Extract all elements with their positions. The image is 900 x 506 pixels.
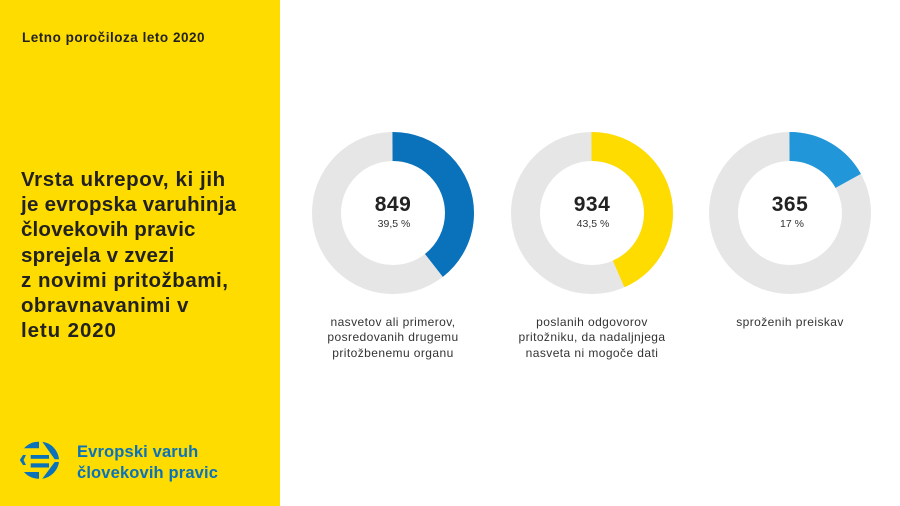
value: 934: 934 [574, 193, 610, 216]
caption 2: nasveta ni mogoče dati [526, 346, 658, 360]
panel: yellow sidebar [0, 0, 280, 506]
caption 2: poslanih odgovorov [536, 314, 648, 328]
title: je evropska varuhinja [21, 193, 236, 216]
donut chart: 39.5 % [312, 132, 474, 294]
donut chart: 17 % [709, 132, 871, 294]
icon: ombudsman logo [20, 442, 59, 479]
percentage: 39,5 %: 39,5 % [378, 218, 410, 230]
organisation name [77, 443, 218, 482]
title: z novimi pritožbami, [21, 269, 228, 292]
caption 3: sproženih preiskav [736, 314, 844, 328]
caption 1: posredovanih drugemu [327, 330, 459, 344]
caption 2 [518, 314, 666, 360]
title: sprejela v zvezi [21, 244, 175, 267]
title: letu 2020 [21, 319, 117, 342]
caption 1 [327, 314, 459, 360]
value: 365: 365 [772, 193, 808, 216]
report label: Letno poročiloza leto 2020 [22, 30, 205, 45]
caption 1: nasvetov ali primerov, [330, 314, 456, 328]
organisation name: Evropski varuh [77, 443, 198, 461]
organisation name: človekovih pravic [77, 464, 218, 482]
percentage: 17 %: 17 % [780, 218, 804, 230]
title: človekovih pravic [21, 218, 196, 241]
percentage: 43,5 %: 43,5 % [577, 218, 609, 230]
caption 2: pritožniku, da nadaljnjega [518, 330, 666, 344]
title [20, 168, 236, 342]
donut chart: 43.5 % [511, 132, 673, 294]
title: obravnavanimi v [21, 294, 189, 317]
title: Vrsta ukrepov, ki jih [21, 168, 226, 191]
value: 849: 849 [375, 193, 411, 216]
caption 1: pritožbenemu organu [332, 346, 454, 360]
